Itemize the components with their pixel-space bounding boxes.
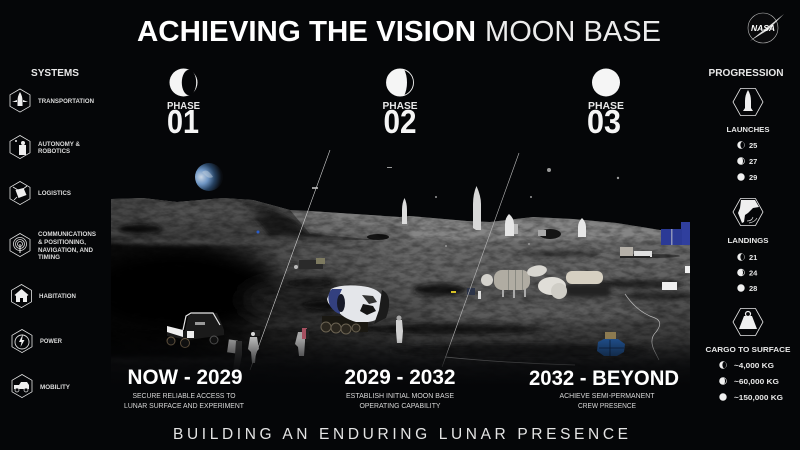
system: communications: & POSITIONING, [38,239,86,246]
small markers [256,167,619,247]
timeline: now to 2029: NOW - 2029 [128,365,243,389]
rocket: far lander [402,198,407,224]
title [137,16,661,48]
timeline: 2032 and beyond: ACHIEVE SEMI-PERMANENT [560,391,655,400]
boxes [662,266,690,290]
system: habitation: HABITATION [39,293,76,300]
cargo to surface: ~4,000 KG [734,361,774,370]
label: phase 01: 01 [167,103,199,140]
system: communications: TIMING [38,254,60,261]
icon: Earth [195,163,223,191]
label: phase 02: PHASE [382,101,418,112]
label: phase 03: 03 [587,103,621,140]
habitat modules [481,264,610,299]
label: phase 02: 02 [384,103,416,140]
icon: full moon [592,68,620,96]
system: transportation [10,89,94,112]
system: transportation: TRANSPORTATION [38,98,94,105]
launches: 27 [749,157,757,166]
timeline: 2032 and beyond [529,366,679,410]
system: power [12,330,62,353]
landings [728,236,768,293]
system: communications: NAVIGATION, AND [38,247,93,254]
cargo to surface: CARGO TO SURFACE [706,345,790,354]
system: communications: COMMUNICATIONS [38,231,97,238]
phase 03 [587,68,624,140]
icon: half moon [386,69,414,96]
rocket: tall lander [473,186,481,230]
landings: LANDINGS [728,236,768,245]
phase 01 [167,68,200,140]
system: logistics [10,182,72,205]
solar panels [661,222,690,245]
pressurized rover [321,285,389,334]
phase 02 [382,69,418,140]
astronaut and rover near crater [451,288,481,299]
timeline: 2029 to 2032: 2029 - 2032 [344,365,456,389]
icon: crescent moon [170,68,198,96]
launches: LAUNCHES [726,125,770,134]
cargo to surface [706,345,790,402]
launches [726,125,770,182]
heading: progression: PROGRESSION [708,67,784,79]
system: autonomy and robotics: ROBOTICS [38,148,71,155]
title: MOON BASE [485,16,661,48]
launches: 29 [749,173,757,182]
terrain [111,198,690,366]
blue lander [597,332,625,356]
system: autonomy and robotics: AUTONOMY & [38,141,80,148]
icon: launches hexagon [733,88,763,116]
landings: 24 [749,268,758,278]
system: mobility [12,374,71,398]
timeline: now to 2029: SECURE RELIABLE ACCESS TO [132,391,236,400]
system: logistics: LOGISTICS [38,190,72,197]
logo: NASA: NASA [751,24,775,33]
rover: left pickup [167,313,224,348]
phase divider lines [250,150,519,370]
timeline: 2029 to 2032: OPERATING CAPABILITY [360,401,440,410]
landings: 28 [749,284,757,293]
panel: systems [10,68,97,398]
launches: 25 [749,141,757,150]
icon: landings hexagon [733,198,763,226]
system: habitation [12,284,76,308]
label: phase 03: PHASE [588,101,624,112]
system: communications [10,231,97,261]
timeline: now to 2029: LUNAR SURFACE AND EXPERIMENT [124,401,244,410]
panel: lunar base scene [111,150,690,370]
rover: distant [538,229,561,239]
panel: progression [706,67,790,402]
rover: mid distance [294,258,325,269]
tagline: BUILDING AN ENDURING LUNAR PRESENCE [173,426,628,443]
timeline: 2032 and beyond: CREW PRESENCE [578,401,636,410]
bottom fade [111,338,690,386]
system: power: POWER [40,338,62,345]
vehicle: far right [620,247,652,258]
timeline: 2029 to 2032: ESTABLISH INITIAL MOON BASE [346,391,454,400]
timeline: 2029 to 2032 [344,365,456,410]
timeline: 2032 and beyond: 2032 - BEYOND [529,366,679,390]
logo: NASA [748,13,784,43]
cable [445,294,660,365]
cargo to surface: ~150,000 KG [734,393,783,402]
label: phase 01: PHASE [167,101,200,112]
heading: systems: SYSTEMS [31,68,79,79]
lander: right [578,218,586,237]
timeline: now to 2029 [124,365,244,410]
icon: cargo weight hexagon [733,308,763,336]
landings: 21 [749,253,757,262]
cargo to surface: ~60,000 KG [734,377,779,386]
lander: middle [505,214,518,236]
system: mobility: MOBILITY [40,384,71,391]
system: autonomy and robotics [10,136,80,159]
astronauts [227,316,403,364]
title: ACHIEVING THE VISION [137,16,476,48]
